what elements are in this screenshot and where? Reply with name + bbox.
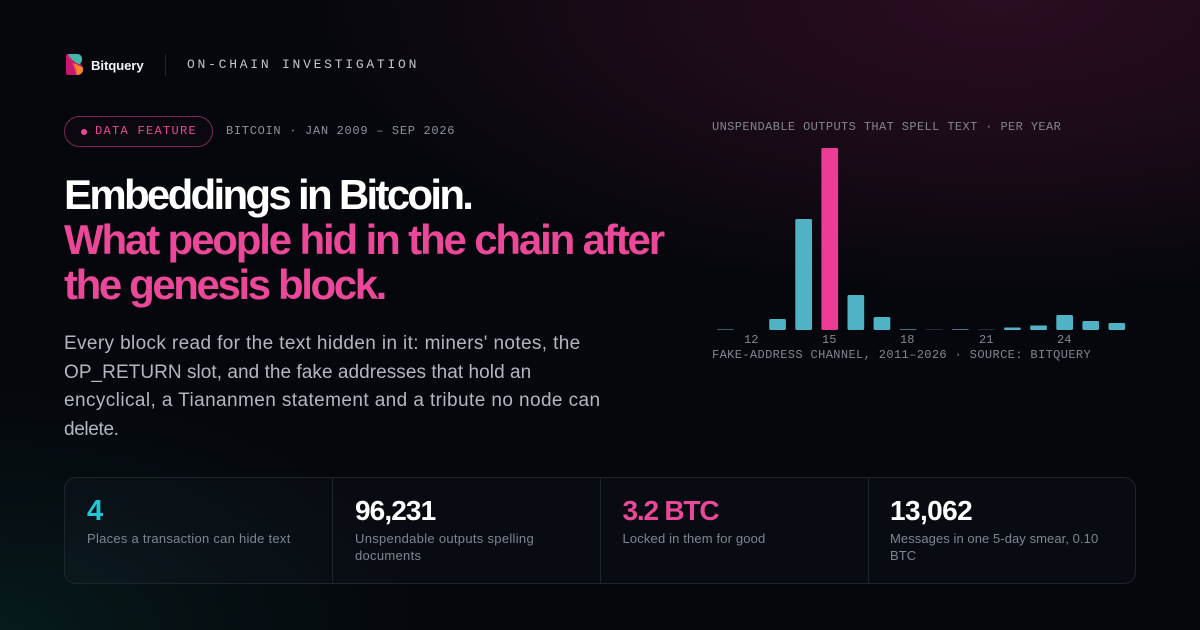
panel: stats xyxy=(64,477,1136,584)
badge text: DATA FEATURE xyxy=(95,124,197,138)
title xyxy=(64,171,664,308)
title: the genesis block. xyxy=(64,261,385,308)
chart title: UNSPENDABLE OUTPUTS THAT SPELL TEXT · PER YEAR xyxy=(712,120,1061,134)
description: OP_RETURN slot, and the fake addresses that hold an xyxy=(64,362,531,382)
x axis labels: 12 xyxy=(744,333,758,347)
x axis labels: 24 xyxy=(1057,333,1071,347)
x axis labels: 21 xyxy=(979,333,993,347)
badge dot xyxy=(81,129,87,135)
stat: messages: 13,062 xyxy=(890,495,972,526)
date range: BITCOIN · JAN 2009 – SEP 2026 xyxy=(226,124,455,138)
title: Embeddings in Bitcoin. xyxy=(64,171,471,218)
stat: locked: Locked in them for good xyxy=(622,531,765,546)
stat: messages xyxy=(868,478,1137,583)
stat: places: Places a transaction can hide text xyxy=(87,531,291,546)
stat: messages: Messages in one 5-day smear, 0.10 xyxy=(890,531,1098,546)
description: encyclical, a Tiananmen statement and a tribute no node can xyxy=(64,390,600,411)
bar chart xyxy=(717,148,1126,330)
stat: places xyxy=(87,495,291,546)
stat: locked xyxy=(600,478,869,583)
stat: messages: BTC xyxy=(890,548,916,563)
header divider xyxy=(165,54,166,76)
description: delete. xyxy=(64,418,119,440)
x axis labels: 15 xyxy=(822,333,836,347)
x axis labels xyxy=(744,333,1071,347)
title: What people hid in the chain after xyxy=(64,216,663,263)
stat: locked: 3.2 BTC xyxy=(622,495,718,526)
badge: data feature xyxy=(64,116,213,147)
description: Every block read for the text hidden in it: miners' notes, the xyxy=(64,333,581,354)
x axis labels: 18 xyxy=(900,333,914,347)
chart source note: FAKE-ADDRESS CHANNEL, 2011–2026 · SOURCE: BITQUERY xyxy=(712,348,1091,362)
description xyxy=(64,333,600,440)
icon: Bitquery logo xyxy=(66,54,83,75)
stat: outputs: Unspendable outputs spelling documents xyxy=(355,531,534,563)
stat: places: 4 xyxy=(87,495,102,527)
stat: outputs: 96,231 xyxy=(355,495,435,526)
header label: ON-CHAIN INVESTIGATION xyxy=(187,57,419,72)
stat: outputs xyxy=(332,478,601,583)
brand name: Bitquery xyxy=(91,58,144,73)
